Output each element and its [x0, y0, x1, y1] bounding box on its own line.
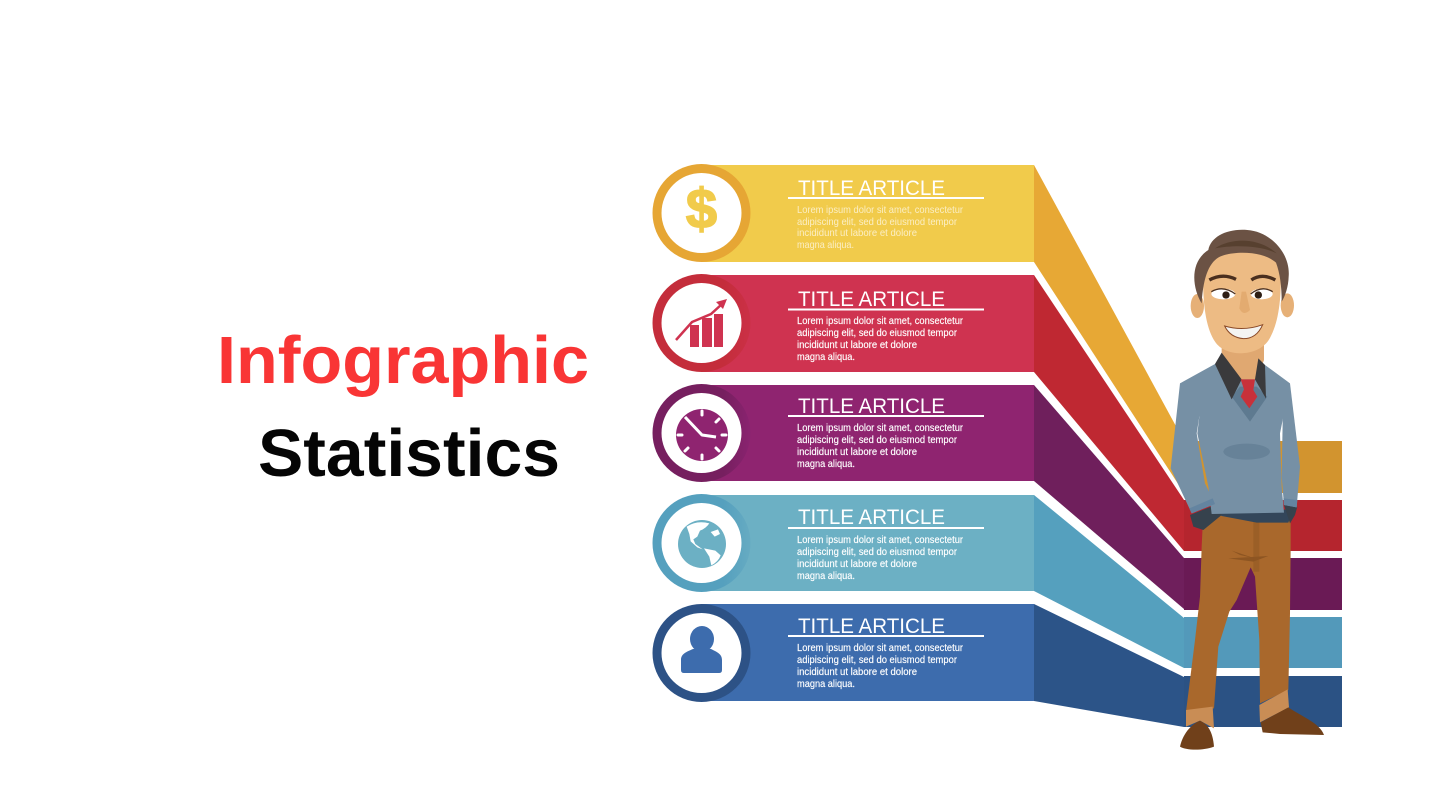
panel: person band — [652, 604, 1342, 727]
text block: globe band: magna aliqua. — [797, 570, 855, 582]
text block: dollar band: Lorem ipsum dolor sit amet, consectetur — [797, 204, 963, 216]
text block: person band: incididunt ut labore et dolore — [797, 666, 917, 678]
title — [217, 323, 589, 491]
hair — [1194, 230, 1289, 303]
title: Infographic — [217, 323, 589, 398]
title: Statistics — [258, 416, 560, 491]
text block: clock band — [788, 395, 984, 470]
panel: chart band — [652, 274, 1342, 551]
icon: dollar — [652, 164, 750, 262]
face — [1203, 251, 1281, 353]
icon: growth chart — [652, 274, 750, 372]
text block: globe band — [788, 506, 984, 582]
nose — [1239, 292, 1250, 313]
text block: chart band: incididunt ut labore et dolore — [797, 339, 917, 351]
text block: person band: magna aliqua. — [797, 678, 855, 690]
icon: dollar: $ — [686, 177, 717, 240]
sleeves and body — [1171, 383, 1215, 513]
text block: dollar band — [788, 177, 984, 251]
panel: dollar band — [652, 164, 1342, 493]
text block: person band: adipiscing elit, sed do eiusmod tempor — [797, 654, 957, 666]
text block: globe band: adipiscing elit, sed do eiusmod tempor — [797, 546, 957, 558]
illustration: smiling businessman — [1171, 230, 1324, 750]
text block: person band — [788, 615, 984, 690]
neck — [1222, 337, 1264, 379]
panel: globe band — [652, 494, 1342, 668]
text block: dollar band: incididunt ut labore et dolore — [797, 227, 917, 239]
text block: chart band: TITLE ARTICLE — [798, 288, 945, 311]
text block: clock band: TITLE ARTICLE — [798, 395, 945, 418]
text block: chart band: magna aliqua. — [797, 351, 855, 363]
text block: dollar band: magna aliqua. — [797, 239, 854, 251]
text block: clock band: magna aliqua. — [797, 458, 855, 470]
text block: dollar band: TITLE ARTICLE — [798, 177, 945, 200]
text block: clock band: incididunt ut labore et dolore — [797, 446, 917, 458]
tie — [1241, 379, 1257, 408]
brows — [1209, 276, 1236, 280]
icon: clock — [652, 384, 750, 482]
collar — [1215, 353, 1242, 399]
mouth — [1225, 325, 1263, 339]
eyes — [1211, 289, 1235, 299]
text block: chart band: Lorem ipsum dolor sit amet, consectetur — [797, 315, 963, 327]
ears — [1191, 294, 1204, 318]
text block: chart band: adipiscing elit, sed do eiusmod tempor — [797, 327, 957, 339]
icon: globe — [652, 494, 750, 592]
panel: clock band — [652, 384, 1342, 610]
text block: dollar band: adipiscing elit, sed do eiusmod tempor — [797, 216, 957, 228]
text block: person band: Lorem ipsum dolor sit amet, consectetur — [797, 642, 963, 654]
text block: globe band: TITLE ARTICLE — [798, 506, 945, 529]
text block: person band: TITLE ARTICLE — [798, 615, 945, 638]
text block: globe band: Lorem ipsum dolor sit amet, consectetur — [797, 534, 963, 546]
text block: clock band: Lorem ipsum dolor sit amet, consectetur — [797, 422, 963, 434]
text block: chart band — [788, 288, 984, 363]
text block: clock band: adipiscing elit, sed do eiusmod tempor — [797, 434, 957, 446]
icon: person — [652, 604, 750, 702]
text block: globe band: incididunt ut labore et dolore — [797, 558, 917, 570]
